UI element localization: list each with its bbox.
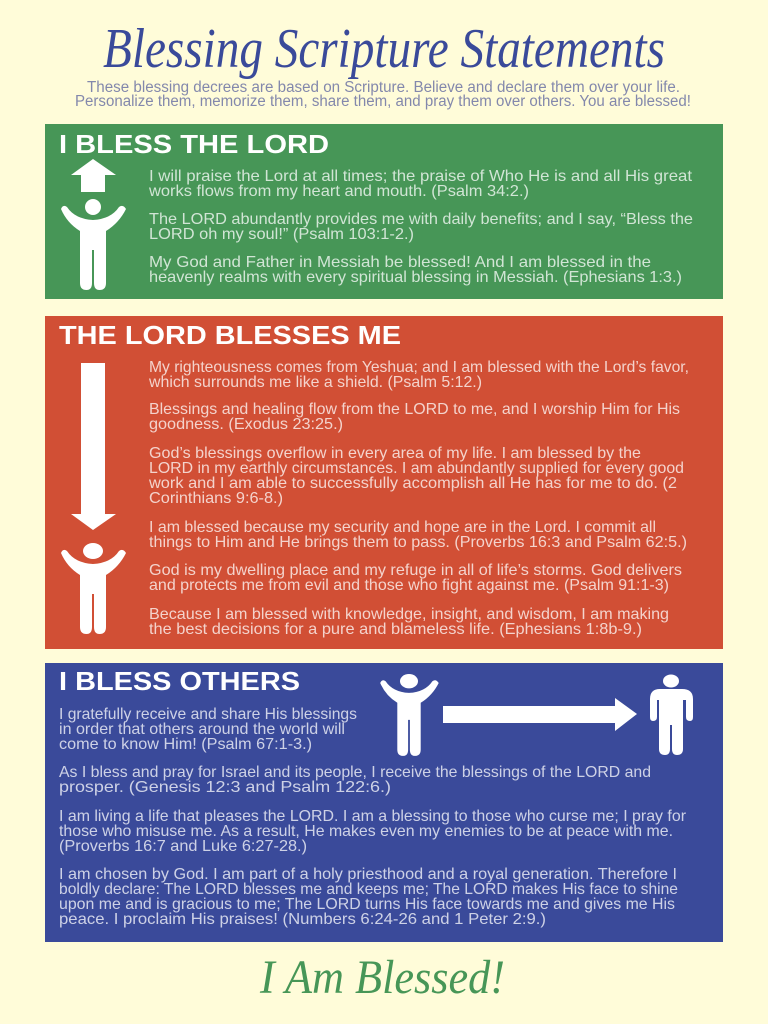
intro text (75, 79, 691, 110)
panel: I bless the Lord (45, 124, 723, 299)
text: blue statements: I gratefully receive and share His blessings (59, 706, 357, 723)
icon: up arrow (71, 159, 116, 192)
icon: standing person (650, 674, 693, 755)
panel: The Lord blesses me (45, 316, 723, 649)
intro text: These blessing decrees are based on Scripture. Believe and declare them over your life. (87, 79, 680, 96)
icon: person with raised arms (380, 674, 439, 756)
text: green statements: works flows from my heart and mouth. (Psalm 34:2.) (148, 183, 529, 200)
text: blue statements: prosper. (Genesis 12:3 and Psalm 122:6.) (59, 779, 391, 796)
text: blue statements: boldly declare: The LORD blesses me and keeps me; The LORD makes His face to shine (59, 881, 678, 898)
text: red statements: the best decisions for a pure and blameless life. (Ephesians 1:8b-9.) (149, 621, 642, 638)
title: Blessing Scripture Statements (103, 18, 665, 80)
text: red statements: LORD in my earthly circumstances. I am abundantly supplied for every good (149, 460, 684, 477)
text: red statements: I am blessed because my security and hope are in the Lord. I commit all (149, 519, 656, 536)
text: blue statements: I am living a life that pleases the LORD. I am a blessing to those who curse me; I pray for (59, 808, 687, 825)
heading: The Lord blesses me: THE LORD BLESSES ME (59, 320, 401, 350)
text: red statements (148, 359, 689, 638)
text: red statements: work and I am able to successfully accomplish all He has for me to do. (2 (148, 475, 677, 492)
text: red statements: God’s blessings overflow in every area of my life. I am blessed by the (149, 445, 641, 462)
text: red statements: and protects me from evil and those who fight against me. (Psalm 91:1-3) (149, 577, 669, 594)
text: blue statements: come to know Him! (Psalm 67:1-3.) (59, 736, 312, 753)
text: blue statements (59, 706, 687, 928)
text: red statements: goodness. (Exodus 23:25.) (149, 416, 343, 433)
heading: I bless others: I BLESS OTHERS (59, 666, 300, 696)
text: blue statements: those who misuse me. As a result, He makes even my enemies to be at peace with me. (59, 823, 673, 840)
text: blue statements: in order that others around the world will (59, 721, 345, 738)
text: green statements: I will praise the Lord at all times; the praise of Who He is and all His great (149, 168, 693, 185)
text: blue statements: peace. I proclaim His praises! (Numbers 6:24-26 and 1 Peter 2:9.) (59, 911, 546, 928)
icon: person with raised arms (61, 199, 126, 290)
text: green statements: heavenly realms with every spiritual blessing in Messiah. (Ephesians 1:3.) (149, 269, 682, 286)
text: red statements: God is my dwelling place and my refuge in all of life’s storms. God delivers (149, 562, 682, 579)
text: red statements: which surrounds me like a shield. (Psalm 5:12.) (148, 374, 482, 391)
text: red statements: Corinthians 9:6-8.) (149, 490, 283, 507)
intro text: Personalize them, memorize them, share them, and pray them over others. You are blessed! (75, 93, 691, 110)
text: red statements: Blessings and healing flow from the LORD to me, and I worship Him for His (149, 401, 680, 418)
text: green statements: My God and Father in Messiah be blessed! And I am blessed in the (149, 254, 651, 271)
text: green statements: The LORD abundantly provides me with daily benefits; and I say, “Bless the (149, 211, 693, 228)
icon: down arrow (71, 363, 116, 530)
text: green statements: LORD oh my soul!” (Psalm 103:1-2.) (149, 226, 414, 243)
text: blue statements: upon me and is gracious to me; The LORD turns His face towards me and gives me His (59, 896, 675, 913)
text: red statements: My righteousness comes from Yeshua; and I am blessed with the Lord’s favor, (149, 359, 689, 376)
text: blue statements: As I bless and pray for Israel and its people, I receive the blessings of the LORD and (59, 764, 651, 781)
text: blue statements: I am chosen by God. I am part of a holy priesthood and a royal generation. Therefore I (59, 866, 677, 883)
text: red statements: Because I am blessed with knowledge, insight, and wisdom, I am making (149, 606, 669, 623)
heading: I bless the Lord: I BLESS THE LORD (59, 129, 329, 159)
icon: person with raised arms (61, 543, 126, 634)
icon: right arrow (443, 698, 637, 731)
closing tagline: I Am Blessed! (259, 951, 505, 1004)
text: red statements: things to Him and He brings them to pass. (Proverbs 16:3 and Psalm 62:5.) (149, 534, 687, 551)
text: green statements (148, 168, 693, 286)
panel: I bless others (45, 663, 723, 942)
text: blue statements: (Proverbs 16:7 and Luke 6:27-28.) (59, 838, 307, 855)
